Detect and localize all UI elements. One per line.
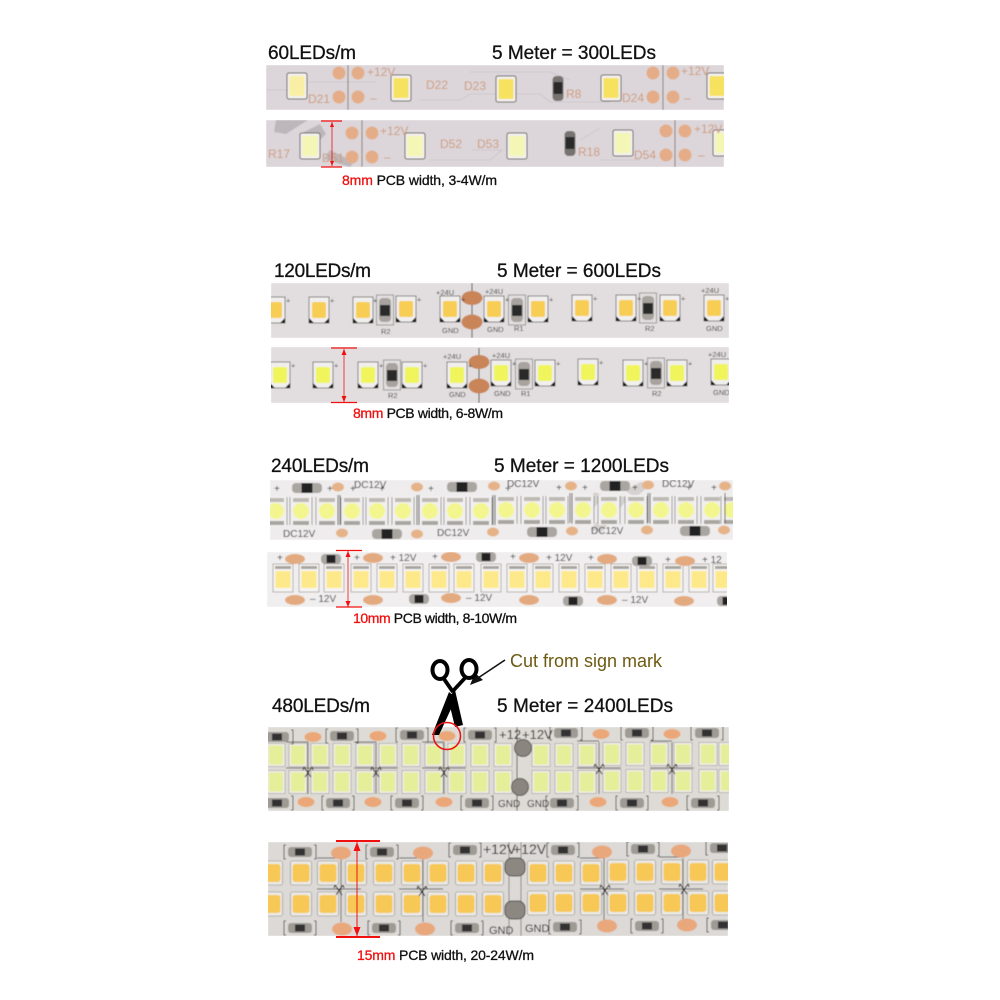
silkscreen labels: DC12V bbox=[437, 528, 470, 539]
silkscreen labels: DC12V bbox=[507, 479, 540, 490]
silkscreen labels: + bbox=[588, 553, 594, 564]
resistors bbox=[261, 726, 723, 810]
silkscreen labels: – 12V bbox=[466, 593, 492, 604]
resistors bbox=[284, 841, 739, 935]
silkscreen labels: DC12V bbox=[354, 480, 387, 491]
LEDs bbox=[273, 564, 733, 592]
copper solder pads bbox=[468, 355, 490, 394]
silkscreen labels: + bbox=[350, 484, 356, 495]
silkscreen labels: + 12V bbox=[390, 553, 417, 564]
silkscreen labels: GND bbox=[494, 389, 511, 398]
callout: Cut from sign mark: Cut from sign mark bbox=[510, 651, 663, 671]
mini scissor marks bbox=[334, 884, 689, 896]
silkscreen labels: + bbox=[428, 484, 434, 495]
width marker: 15mm bbox=[336, 841, 380, 937]
silkscreen labels: – bbox=[370, 91, 377, 105]
silkscreen labels: R1 bbox=[514, 324, 524, 333]
copper pads bbox=[298, 729, 680, 807]
silkscreen labels: + bbox=[593, 294, 598, 303]
silkscreen labels: + bbox=[505, 484, 511, 495]
width marker: 10mm bbox=[336, 550, 362, 607]
cut lines and circuit traces bbox=[286, 741, 694, 794]
silkscreen labels: + bbox=[505, 295, 510, 304]
silkscreen labels: + bbox=[681, 294, 686, 303]
heading: 60LEDs/m: 60LEDs/m bbox=[268, 43, 356, 64]
silkscreen labels: + bbox=[632, 483, 638, 494]
copper pads bbox=[332, 66, 680, 104]
resistors bbox=[384, 358, 664, 390]
silkscreen labels: +12V bbox=[513, 841, 547, 857]
silkscreen labels: + bbox=[725, 294, 730, 303]
silkscreen labels: +12V bbox=[694, 122, 722, 136]
silkscreen labels: + bbox=[582, 483, 588, 494]
silkscreen labels: + bbox=[665, 555, 671, 566]
strip: 240 LEDs/m warm white, rectangular LEDs bbox=[267, 552, 737, 607]
heading: 5 Meter = 2400LEDs: 5 Meter = 2400LEDs bbox=[497, 696, 673, 717]
caption: 15mm PCB width, 20-24W/m: 15mm PCB width, 20-24W/m bbox=[357, 947, 534, 963]
silkscreen labels: +12V bbox=[483, 841, 517, 857]
silkscreen labels: GND bbox=[489, 925, 514, 937]
silkscreen labels bbox=[498, 727, 553, 810]
LED rows bbox=[267, 742, 737, 794]
strip: 60 LEDs/m warm white bbox=[266, 64, 727, 110]
silkscreen labels: GND bbox=[449, 390, 466, 399]
silkscreen labels: R2 bbox=[388, 391, 398, 400]
heading: 240LEDs/m: 240LEDs/m bbox=[271, 456, 369, 477]
LEDs bbox=[265, 295, 724, 323]
silkscreen labels: + bbox=[549, 295, 554, 304]
silkscreen labels: – bbox=[698, 148, 705, 162]
silkscreen labels: + bbox=[686, 483, 692, 494]
heading: 120LEDs/m: 120LEDs/m bbox=[274, 261, 371, 282]
arrow pointing at scissors bbox=[470, 660, 505, 685]
silkscreen labels: – bbox=[684, 91, 691, 105]
silkscreen labels: R17 bbox=[268, 147, 290, 161]
silkscreen labels bbox=[277, 552, 722, 606]
silkscreen labels: +24U bbox=[492, 351, 510, 360]
silkscreen labels: + bbox=[423, 361, 428, 370]
silkscreen labels: D21 bbox=[308, 92, 330, 106]
resistors bbox=[321, 552, 737, 606]
resistors bbox=[292, 481, 710, 539]
silkscreen labels: + bbox=[512, 359, 517, 368]
icon: scissors bbox=[432, 660, 476, 735]
silkscreen labels: +12 bbox=[499, 727, 521, 742]
strip: 480 LEDs/m cool white bbox=[261, 726, 737, 811]
silkscreen labels: D53 bbox=[477, 137, 499, 151]
silkscreen labels: + bbox=[556, 359, 561, 368]
strip: 240 LEDs/m cool white, circular LEDs bbox=[265, 479, 743, 540]
solder joints bbox=[512, 740, 532, 796]
LED rows bbox=[262, 860, 734, 916]
heading: 5 Meter = 300LEDs: 5 Meter = 300LEDs bbox=[492, 43, 656, 64]
silkscreen labels: D52 bbox=[440, 137, 462, 151]
silkscreen labels: +12V bbox=[380, 124, 408, 138]
strip: 480 LEDs/m warm white bbox=[262, 841, 739, 937]
silkscreen labels: GND bbox=[442, 326, 459, 335]
strip: 60 LEDs/m cool white bbox=[266, 120, 733, 167]
silkscreen labels: – bbox=[384, 150, 391, 164]
silkscreen labels: R2 bbox=[652, 389, 662, 398]
silkscreen labels: + bbox=[644, 359, 649, 368]
silkscreen labels: +24U bbox=[436, 288, 454, 297]
resistor R8 bbox=[552, 76, 564, 101]
silkscreen labels: +24U bbox=[443, 352, 461, 361]
silkscreen labels bbox=[291, 350, 730, 400]
silkscreen labels: R1 bbox=[521, 389, 531, 398]
silkscreen labels: +24U bbox=[701, 286, 719, 295]
silkscreen labels: +12V bbox=[681, 64, 709, 78]
strip: 120 LEDs/m cool white bbox=[270, 347, 731, 403]
silkscreen labels: DC12V bbox=[662, 479, 695, 490]
silkscreen labels: + bbox=[274, 484, 280, 495]
silkscreen labels: GND bbox=[713, 388, 730, 397]
resistor R18 bbox=[564, 131, 576, 156]
silkscreen labels: + bbox=[510, 552, 516, 563]
silkscreen labels: + bbox=[327, 484, 333, 495]
LEDs bbox=[265, 495, 743, 526]
silkscreen labels: R18 bbox=[578, 145, 600, 159]
group bracket lines bbox=[338, 493, 725, 525]
silkscreen labels: + bbox=[354, 553, 360, 564]
silkscreen labels: + bbox=[379, 361, 384, 370]
caption: 8mm PCB width, 3-4W/m: 8mm PCB width, 3-4W/m bbox=[342, 172, 497, 188]
silkscreen labels: + 12V bbox=[546, 553, 573, 564]
silkscreen labels: + bbox=[599, 358, 604, 367]
copper pads bbox=[332, 480, 731, 538]
silkscreen labels: + bbox=[688, 359, 693, 368]
heading: 5 Meter = 600LEDs: 5 Meter = 600LEDs bbox=[497, 261, 661, 282]
cut lines and circuit traces bbox=[317, 857, 703, 922]
silkscreen labels: + bbox=[432, 552, 438, 563]
silkscreen labels: +12V bbox=[367, 65, 395, 79]
copper pads bbox=[346, 124, 692, 164]
silkscreen labels: + bbox=[379, 484, 385, 495]
silkscreen labels bbox=[268, 124, 722, 162]
silkscreen labels: D22 bbox=[426, 78, 448, 92]
silkscreen labels: +24U bbox=[708, 350, 726, 359]
silkscreen labels: + bbox=[277, 553, 283, 564]
silkscreen labels: GND bbox=[706, 324, 723, 333]
silkscreen labels: + bbox=[468, 361, 473, 370]
silkscreen labels: – 12V bbox=[310, 594, 336, 605]
mini scissor marks bbox=[303, 764, 677, 777]
silkscreen labels: D51 bbox=[322, 151, 344, 165]
silkscreen labels: – 12V bbox=[622, 595, 648, 606]
silkscreen labels: R8 bbox=[566, 87, 582, 101]
silkscreen labels: + bbox=[637, 294, 642, 303]
silkscreen labels: + bbox=[373, 296, 378, 305]
silkscreen labels: DC12V bbox=[591, 526, 624, 537]
heading: 5 Meter = 1200LEDs: 5 Meter = 1200LEDs bbox=[494, 456, 669, 477]
caption: 8mm PCB width, 6-8W/m: 8mm PCB width, 6-8W/m bbox=[353, 405, 503, 421]
silkscreen labels: + bbox=[556, 483, 562, 494]
heading: 480LEDs/m: 480LEDs/m bbox=[272, 696, 370, 717]
silkscreen labels: DC12V bbox=[283, 529, 316, 540]
copper pads bbox=[331, 844, 697, 936]
silkscreen labels: GND bbox=[527, 799, 549, 810]
silkscreen labels: + bbox=[711, 483, 717, 494]
caption: 10mm PCB width, 8-10W/m: 10mm PCB width, 8-10W/m bbox=[353, 610, 517, 626]
silkscreen labels: + bbox=[291, 361, 296, 370]
silkscreen labels: D23 bbox=[464, 79, 486, 93]
silkscreen labels: + 12 bbox=[702, 555, 722, 566]
silkscreen labels: + bbox=[461, 295, 466, 304]
LEDs bbox=[300, 130, 733, 159]
silkscreen labels bbox=[274, 479, 717, 540]
silkscreen labels: D24 bbox=[622, 91, 644, 105]
silkscreen labels: + bbox=[286, 296, 291, 305]
red cut-mark circle bbox=[434, 722, 460, 750]
LEDs bbox=[287, 73, 727, 102]
silkscreen labels: GND bbox=[487, 325, 504, 334]
copper pads bbox=[285, 552, 695, 606]
solder joints bbox=[505, 858, 525, 919]
silkscreen labels: R2 bbox=[381, 327, 391, 336]
width marker: 8mm bbox=[321, 121, 342, 167]
silkscreen labels bbox=[286, 286, 730, 336]
LEDs bbox=[270, 359, 731, 388]
silkscreen labels bbox=[483, 841, 550, 937]
silkscreen labels: GND bbox=[498, 799, 520, 810]
resistors bbox=[376, 293, 656, 325]
width marker: 8mm bbox=[331, 348, 357, 402]
silkscreen labels: GND bbox=[525, 923, 550, 935]
silkscreen labels: + bbox=[417, 295, 422, 304]
silkscreen labels bbox=[308, 66, 710, 104]
silkscreen labels: D54 bbox=[634, 148, 656, 162]
silkscreen labels: + bbox=[334, 361, 339, 370]
silkscreen labels: +24U bbox=[485, 287, 503, 296]
silkscreen labels: + bbox=[330, 296, 335, 305]
strip: 120 LEDs/m warm white bbox=[265, 283, 730, 338]
silkscreen labels: +12V bbox=[522, 727, 553, 742]
copper solder pads bbox=[462, 291, 482, 330]
silkscreen labels: R2 bbox=[645, 324, 655, 333]
